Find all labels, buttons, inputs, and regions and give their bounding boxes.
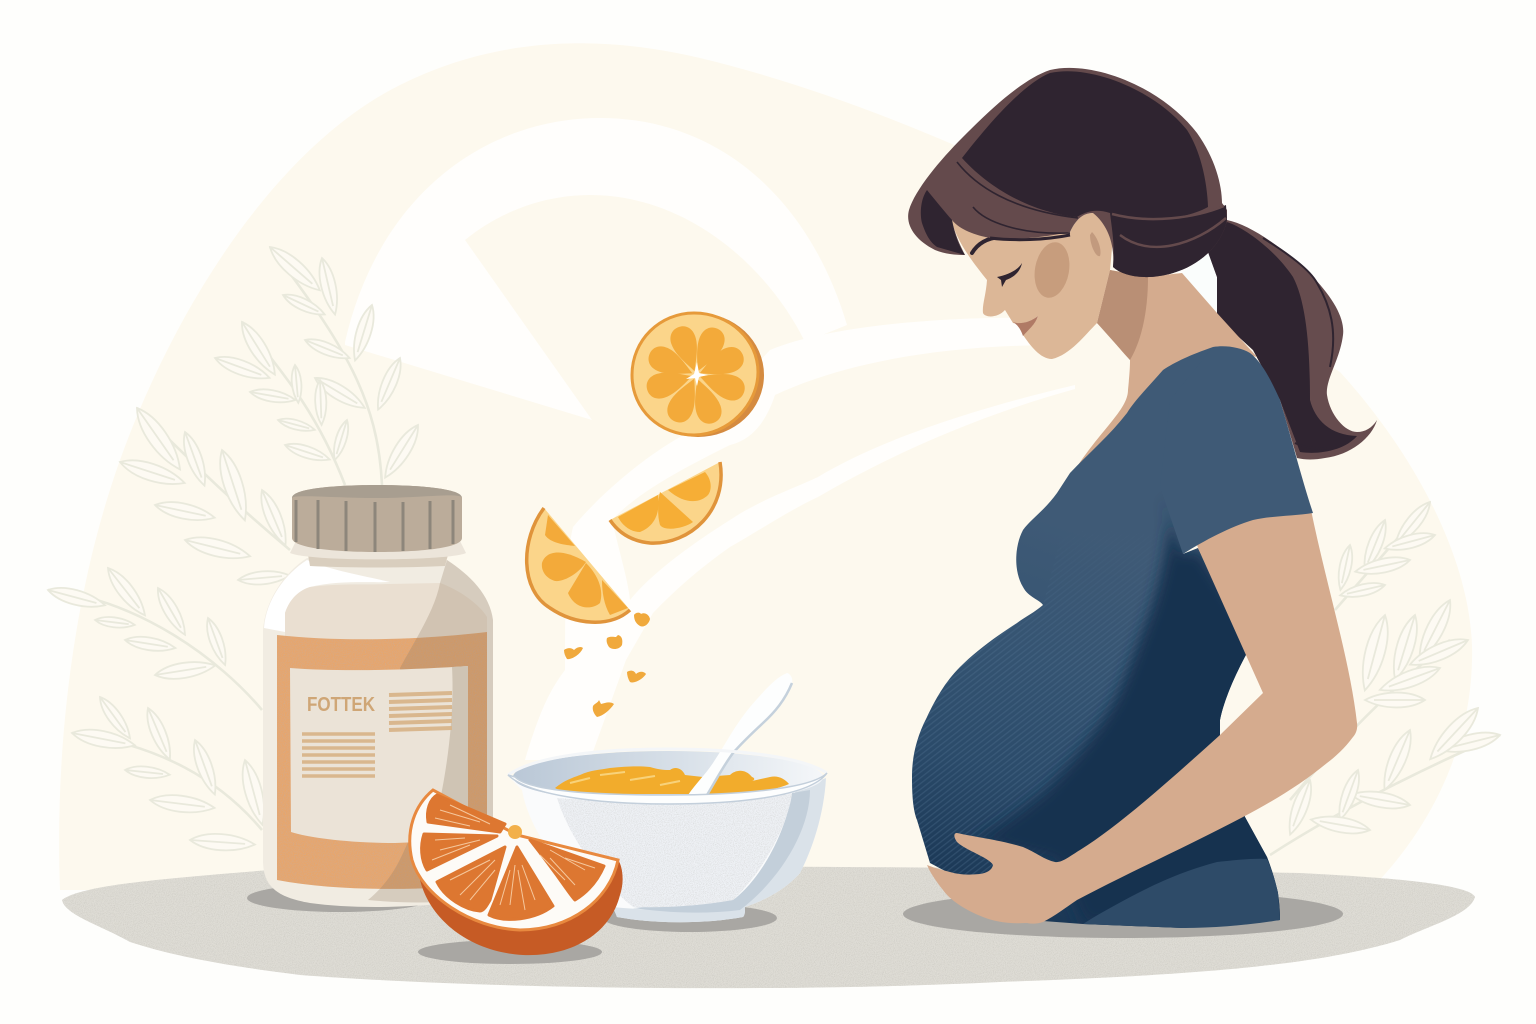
bowl spoon xyxy=(688,673,792,795)
jar label text: FOTTEK xyxy=(307,694,375,716)
hair back band dark xyxy=(1110,205,1227,277)
hair crown dark xyxy=(962,71,1208,219)
bowl outer body xyxy=(510,778,826,922)
ponytail xyxy=(1208,220,1377,460)
bowl speckled panel xyxy=(557,793,792,907)
botanical sprigs right xyxy=(1270,498,1502,855)
orange wedge upper xyxy=(610,462,721,543)
jar white label shaded side xyxy=(430,666,468,840)
jar orange label band xyxy=(277,632,487,889)
ear inner xyxy=(1090,232,1101,256)
orange half xyxy=(410,790,623,955)
orange pith xyxy=(410,790,618,930)
neck shadow xyxy=(1097,270,1148,360)
orange skin xyxy=(420,860,623,955)
woman xyxy=(908,68,1377,930)
bowl rim back line xyxy=(508,749,827,775)
hair strand lines xyxy=(957,162,1078,233)
table surface xyxy=(62,866,1475,988)
jar cap top rim xyxy=(292,485,462,498)
jar glass shadow xyxy=(368,560,493,902)
background cream blob xyxy=(59,43,1472,890)
dark torso shading xyxy=(976,518,1280,928)
orange core xyxy=(508,825,522,839)
bowl food xyxy=(555,766,789,794)
bowl spoon edge xyxy=(707,683,792,795)
eyebrow xyxy=(972,237,1000,253)
hair front lock dark xyxy=(921,190,965,255)
wedge rim xyxy=(527,508,630,622)
sleeve xyxy=(1160,346,1313,554)
wedge rim xyxy=(610,462,721,543)
orange segment fibres xyxy=(432,805,595,910)
bowl food highlights xyxy=(570,772,680,785)
bowl interior xyxy=(513,751,823,803)
ponytail dark xyxy=(1208,222,1357,453)
hairline xyxy=(990,235,1070,240)
skirt lighter part xyxy=(1083,859,1280,928)
white gap behind neck xyxy=(1182,252,1217,313)
jar collar xyxy=(290,541,466,559)
jar upper highlight xyxy=(264,560,390,632)
jar body xyxy=(263,558,493,907)
lips xyxy=(1013,316,1038,336)
hair band highlights xyxy=(1112,206,1226,247)
arm and hand xyxy=(927,490,1357,924)
cheek xyxy=(1030,239,1074,301)
bowl rim front xyxy=(508,773,827,804)
supplement jar xyxy=(263,485,493,907)
orange wedge lower xyxy=(527,508,630,622)
shadows on table xyxy=(247,884,1343,964)
orange crumbs xyxy=(564,613,650,717)
jar inner tint xyxy=(285,583,487,639)
neck xyxy=(1073,270,1257,473)
jar neck xyxy=(308,555,448,568)
jar cap ridges xyxy=(296,500,453,552)
jar cap xyxy=(292,485,462,552)
bowl of cereal xyxy=(508,673,827,922)
slice centre sparkle xyxy=(686,362,708,386)
ponytail strands xyxy=(1263,238,1333,448)
belly hatch texture xyxy=(912,621,1134,874)
eye xyxy=(997,263,1022,287)
jar label lines left xyxy=(302,734,375,776)
face xyxy=(952,213,1113,359)
slice segments xyxy=(644,323,748,427)
botanical sprigs left xyxy=(46,241,425,853)
bowl right side shade xyxy=(613,778,826,922)
torso and belly xyxy=(912,347,1280,928)
bowl inner shadow band xyxy=(633,790,810,913)
jar white label xyxy=(290,666,468,843)
background white swooshes xyxy=(345,118,1075,760)
jar label lines right xyxy=(389,693,452,730)
orange round slice xyxy=(632,313,764,437)
orange segments xyxy=(422,795,604,919)
hair xyxy=(908,68,1227,277)
